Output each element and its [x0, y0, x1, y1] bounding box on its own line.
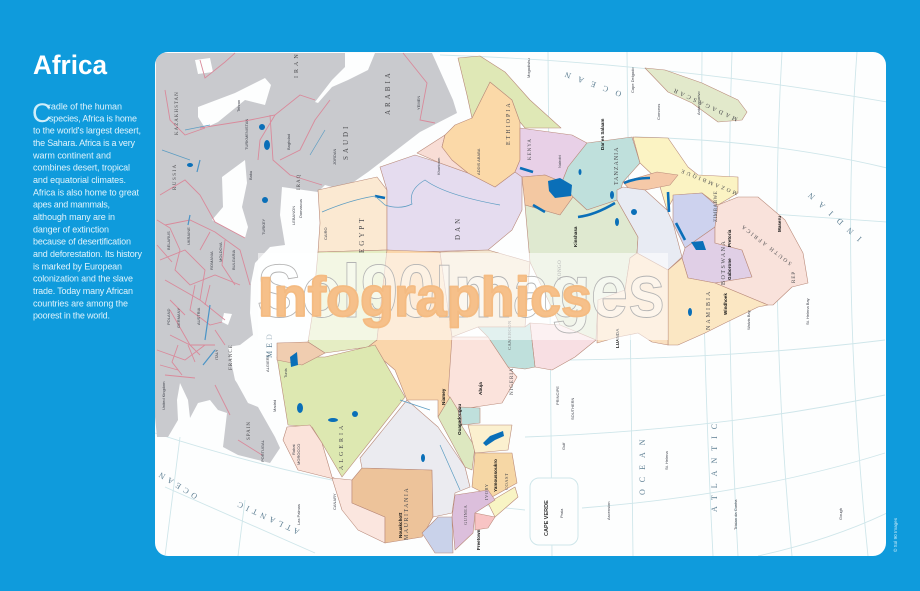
country: Algeria — [277, 345, 405, 477]
country: Zambia — [617, 187, 682, 270]
Africa labels: ADDIS ABABA — [476, 148, 481, 175]
Africa labels: Dar es Salaam — [600, 119, 605, 150]
Africa labels: Nouakchott — [398, 512, 403, 538]
intro text block: combines desert, tropical — [33, 162, 130, 172]
intro text block: to the world's largest desert, — [33, 126, 141, 136]
Europe and Asia labels: IRAQ — [297, 174, 302, 190]
sea: Black Sea — [212, 160, 248, 238]
Africa labels: NAMIBIA — [706, 290, 712, 330]
Europe and Asia labels — [161, 51, 421, 462]
inset: Cape Verde: Praia — [559, 508, 564, 518]
Africa labels: MAURITANIA — [404, 487, 410, 540]
Europe and Asia labels: BELARUS — [166, 231, 171, 250]
Africa labels: Antananarivo — [696, 91, 701, 115]
Africa labels: NIGERIA — [510, 367, 515, 395]
sea: Persian Gulf — [315, 53, 375, 103]
ocean labels — [154, 67, 863, 536]
intro text block: warm continent and — [32, 150, 111, 160]
country: Madagascar — [645, 68, 747, 122]
country: Ivory Coast — [472, 453, 517, 497]
Africa labels: ALGIERS — [265, 354, 270, 372]
ocean labels: ATLANTIC — [233, 498, 301, 536]
Africa labels: BOTSWANA — [721, 240, 727, 285]
country: Uganda — [522, 175, 573, 215]
country: Somalia — [458, 56, 561, 128]
intro text block: countries are among the — [33, 298, 128, 308]
Europe and Asia labels: KAZAKHSTAN — [175, 91, 180, 135]
Africa labels: REP — [792, 271, 797, 283]
Europe and Asia labels: TURKMENISTAN — [244, 119, 249, 150]
country: Mozambique — [633, 137, 738, 210]
Africa labels — [265, 58, 843, 550]
Africa labels: Ouagadougou — [457, 404, 462, 435]
Africa labels: MOROCCO — [296, 444, 301, 465]
intro text block: trade. Today many African — [33, 286, 133, 296]
intro text block: danger of extinction — [33, 224, 109, 234]
intro text block: apes and mammals, — [33, 200, 110, 210]
country: Democratic Republic of the Congo — [525, 197, 638, 340]
intro text block: and equatorial climates. — [33, 175, 126, 185]
Africa labels: Tristan da Cunha — [733, 499, 738, 530]
Africa labels: Freetown — [476, 529, 481, 550]
Europe and Asia labels: ITALY — [214, 349, 219, 360]
ocean labels: ATLANTIC — [710, 417, 719, 512]
lakes and rivers — [187, 124, 706, 462]
Africa labels: Gulf — [561, 442, 566, 450]
Europe and Asia labels: IRAN — [294, 51, 300, 78]
intro text block: although many are in — [33, 212, 115, 222]
Africa labels: GUINEA — [463, 505, 468, 525]
country: Senegal — [422, 517, 453, 553]
Africa labels: Khartoum — [436, 157, 441, 175]
Africa labels: Nairobi — [557, 155, 562, 168]
country: Sudan — [380, 155, 522, 252]
ocean labels: OCEAN — [556, 67, 623, 99]
Europe and Asia labels: Tehran — [236, 100, 241, 112]
Europe and Asia labels: AUSTRIA — [196, 307, 201, 325]
Africa labels: Las Palmas — [296, 504, 301, 525]
intro text block — [32, 98, 142, 320]
Europe and Asia labels: JORDAN — [332, 148, 337, 165]
Africa labels: IVORY — [484, 483, 489, 500]
country: Sierra Leone — [475, 513, 495, 530]
Africa labels: Pretoria — [727, 229, 732, 247]
intro text block: species, Africa is home — [49, 114, 137, 124]
Africa labels: KENYA — [528, 138, 533, 160]
country: Western Sahara — [332, 478, 385, 543]
country: Ethiopia — [442, 82, 520, 187]
country: Tunisia — [277, 342, 325, 365]
intro text block: colonization and the slave — [33, 274, 133, 284]
Africa labels: Comoros — [656, 104, 661, 120]
Africa labels: Windhoek — [723, 293, 728, 315]
Africa labels: ALGERIA — [339, 423, 345, 470]
Africa labels: ETHIOPIA — [506, 101, 512, 145]
Europe and Asia labels: UKRAINE — [186, 227, 191, 245]
Africa labels: Kinshasa — [573, 226, 578, 247]
Africa labels: Gough — [838, 508, 843, 520]
Europe and Asia labels: LEBANON — [291, 206, 296, 225]
Africa labels: MOZAMBIQUE — [678, 167, 739, 196]
country: Mali — [360, 400, 470, 517]
Europe and Asia labels: GERMANY — [176, 307, 181, 328]
country: Niger — [438, 397, 475, 470]
Africa labels: Walvis Bay — [746, 310, 751, 330]
country: Botswana — [682, 227, 752, 283]
watermark: Sol90Images — [257, 249, 665, 333]
intro text block: Africa is also home to great — [33, 188, 139, 198]
title: Africa — [33, 50, 107, 80]
country: Eritrea — [417, 135, 468, 173]
country: Cameroon — [478, 323, 535, 369]
country: Liberia — [488, 487, 518, 517]
Africa labels: St. Helena Bay — [805, 298, 810, 325]
Africa labels: COAST — [504, 473, 509, 490]
country: Guinea — [452, 490, 495, 550]
country: Libya — [308, 250, 387, 353]
Europe and Asia labels: PORTUGAL — [260, 439, 265, 462]
ocean labels: INDIAN — [801, 185, 863, 243]
Africa countries — [277, 56, 808, 553]
Africa labels: DAN — [454, 216, 462, 240]
ocean labels: MED — [265, 331, 274, 358]
region: Europe and Asia landmass — [155, 53, 457, 463]
Europe and Asia labels: TURKEY — [261, 218, 266, 235]
country: Namibia — [668, 258, 768, 345]
Africa labels: Yamoussoukro — [493, 459, 498, 492]
Africa labels: Niamey — [441, 388, 446, 405]
intro text block: and deforestation. Its history — [33, 249, 142, 259]
Europe and Asia labels: MOLDOVA — [218, 242, 223, 262]
sea: Aral and Adriatic — [195, 58, 232, 325]
Europe and Asia labels: ROMANIA — [209, 251, 214, 270]
Africa labels: Rabat — [291, 443, 296, 455]
Africa labels: Cape Delgado — [630, 67, 635, 93]
Africa labels: EGYPT — [358, 215, 366, 253]
Europe and Asia labels: United Kingdom — [161, 381, 166, 410]
Europe and Asia labels: YEMEN — [416, 96, 421, 110]
Africa labels: Mogadishu — [526, 58, 531, 78]
country: Nigeria — [448, 337, 517, 410]
Europe and Asia labels: ARABIA — [384, 70, 392, 115]
intro text block: poorest in the world. — [33, 310, 110, 320]
Africa labels: CANARY — [332, 493, 337, 510]
Europe and Asia labels: SPAIN — [247, 421, 252, 440]
Africa labels: Ascension — [606, 502, 611, 520]
country: Kenya — [515, 128, 587, 182]
Europe and Asia labels: RUSSIA — [173, 163, 178, 190]
Africa labels: Abuja — [478, 382, 483, 395]
map graticule — [155, 52, 887, 556]
ocean labels: OCEAN — [638, 432, 647, 495]
sea: Caspian Sea — [198, 78, 271, 128]
Africa labels: TANZANIA — [614, 146, 620, 185]
Africa labels: Maseru — [777, 216, 782, 232]
inset: Cape Verde — [530, 478, 578, 545]
country: Angola — [597, 253, 668, 345]
Africa labels: PRINCIPE — [555, 386, 560, 405]
Europe and Asia labels: Madrid — [272, 400, 277, 412]
Africa labels: CONGO — [558, 260, 563, 280]
Europe and Asia labels: FRANCE — [229, 344, 234, 370]
Africa labels: SOUTH AFRICA — [739, 222, 793, 266]
country: Morocco — [283, 425, 338, 480]
country: Mauritania — [352, 468, 433, 543]
intro text block: radle of the human — [48, 102, 122, 112]
country: Central African Republic — [440, 250, 530, 337]
Africa labels: LUANDA — [615, 328, 620, 348]
intro text block: because of desertification — [33, 236, 131, 246]
country: Tanzania — [562, 137, 640, 210]
country: Ghana — [468, 425, 512, 453]
ocean labels: OCEAN — [154, 468, 199, 501]
country: South Africa — [715, 197, 808, 305]
Africa labels: CAMEROON — [507, 320, 512, 350]
Europe and Asia labels: SAUDI — [342, 124, 350, 160]
Africa labels: Gaborone — [727, 258, 732, 280]
country: Congo — [530, 323, 596, 370]
Africa labels: ZIMBABWE — [714, 191, 719, 222]
copyright: © Sol 90 Images — [892, 517, 898, 552]
country: Egypt — [318, 177, 387, 252]
Europe and Asia labels: Baghdad — [286, 134, 291, 150]
intro text block: is marked by European — [33, 262, 122, 272]
intro text block: the Sahara. Africa is a very — [33, 138, 136, 148]
Africa labels: Tunis — [283, 368, 288, 378]
Africa labels: CAIRO — [323, 227, 328, 240]
Africa labels: MADAGASCAR — [670, 85, 739, 122]
watermark wash — [258, 253, 668, 340]
Europe and Asia labels: POLAND — [166, 308, 171, 325]
Africa labels: St. Helena — [664, 451, 669, 470]
rivers and lakes of Europe — [188, 160, 215, 365]
Africa labels: SOUTHERN — [570, 397, 575, 420]
panel: map — [154, 51, 887, 556]
inset: Cape Verde: CAPE VERDE — [544, 500, 550, 536]
country: Malawi — [623, 172, 678, 190]
country: Zimbabwe — [673, 193, 718, 248]
watermark: Infographics — [258, 265, 592, 328]
Europe and Asia labels: BULGARIA — [231, 249, 236, 270]
Europe and Asia labels: Baku — [248, 171, 253, 180]
country: Benin — [460, 407, 480, 425]
Europe and Asia labels: Damascus — [298, 199, 303, 218]
country: Chad — [368, 250, 452, 417]
borders of Europe and Asia — [157, 53, 435, 455]
intro text block: C — [32, 98, 52, 128]
